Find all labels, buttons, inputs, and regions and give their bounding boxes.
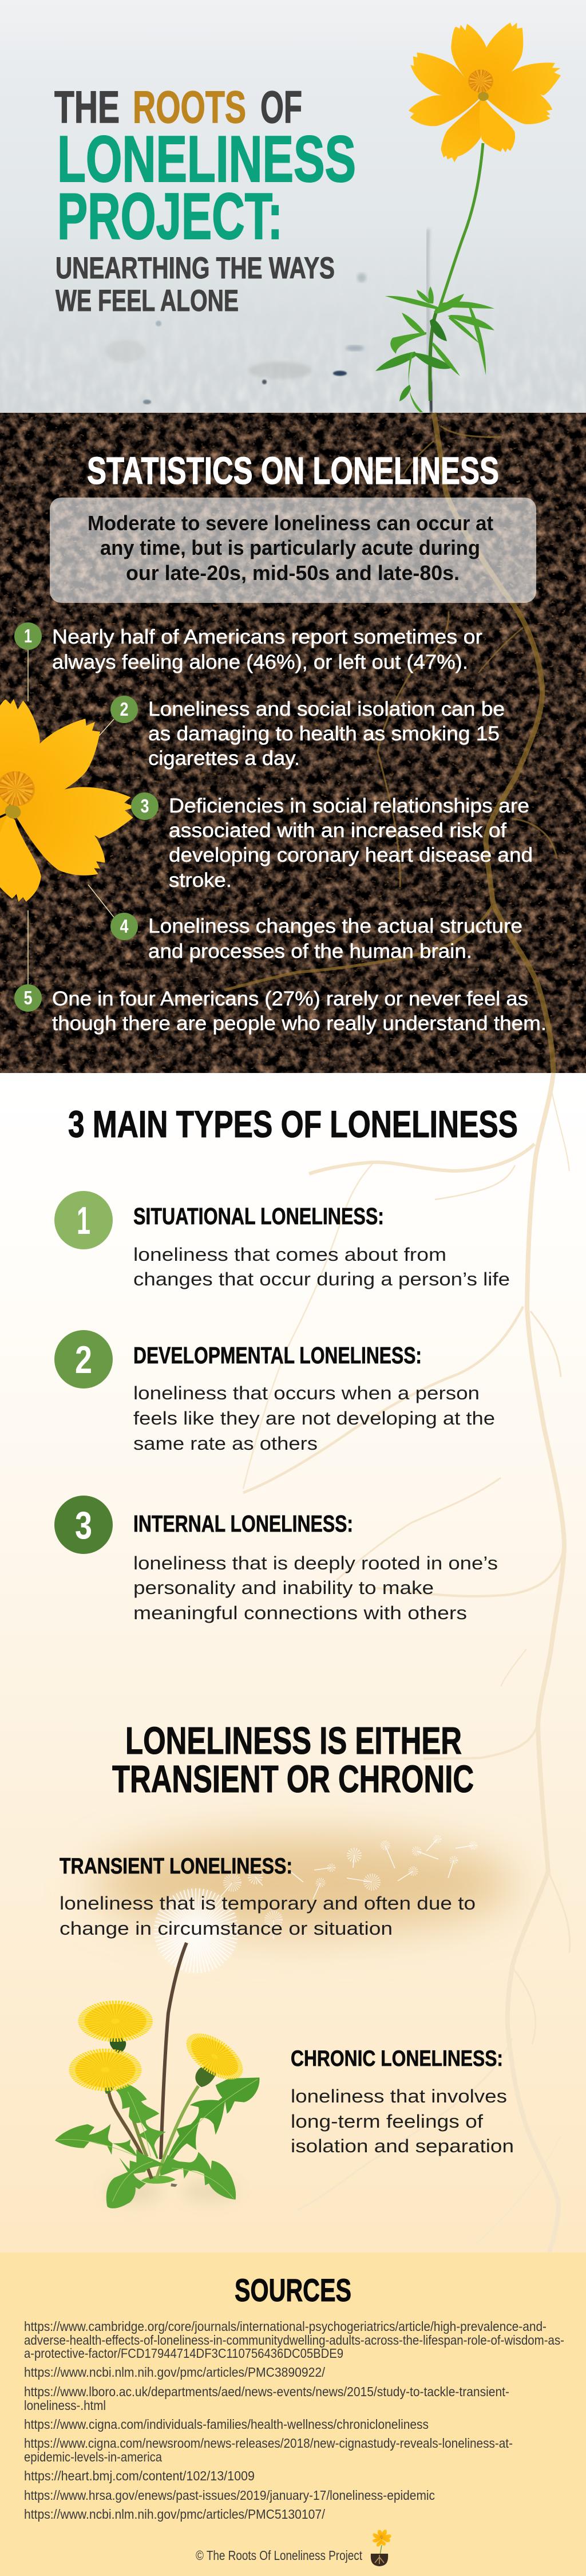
type 3: internal: 3 <box>75 1504 92 1547</box>
type 2: developmental: same rate as others <box>133 1433 318 1454</box>
source list: https://www.cigna.com/individuals-families/health-wellness/chronicloneliness <box>24 2417 429 2432</box>
source list: https://www.ncbi.nlm.nih.gov/pmc/articles/PMC3890922/ <box>24 2365 326 2380</box>
panel: sources <box>0 2252 586 2576</box>
title line 2: LONELINESS <box>57 123 356 196</box>
title <box>54 81 356 318</box>
stat 5: though there are people who really understand them. <box>52 1012 547 1035</box>
type 3: internal: meaningful connections with others <box>133 1603 467 1623</box>
stat 3: developing coronary heart disease and <box>169 844 533 866</box>
type 3: internal: INTERNAL LONELINESS: <box>133 1510 353 1537</box>
transient loneliness text <box>60 1854 476 1939</box>
heading: sources: SOURCES <box>235 2272 351 2308</box>
heading: transient or chronic: TRANSIENT OR CHRONIC <box>112 1758 474 1801</box>
stat 4: and processes of the human brain. <box>148 940 472 962</box>
roots on cream <box>243 1073 570 2252</box>
dandelion flower heads <box>110 2035 126 2053</box>
stat 4: Loneliness changes the actual structure <box>148 915 522 937</box>
transient loneliness text: TRANSIENT LONELINESS: <box>60 1854 292 1879</box>
title line 3: PROJECT: <box>57 180 283 253</box>
callout box: Moderate to severe loneliness can occur at <box>88 511 493 535</box>
icon: logo flower in soil pot <box>371 2530 391 2566</box>
type 2: developmental: DEVELOPMENTAL LONELINESS: <box>133 1342 422 1368</box>
type 2: developmental <box>54 1330 495 1454</box>
type 3: internal: loneliness that is deeply rooted in one’s <box>133 1553 498 1573</box>
chronic loneliness text: long-term feelings of <box>291 2111 483 2132</box>
title line 1: ROOTS <box>133 81 246 132</box>
source list: epidemic-levels-in-america <box>24 2449 162 2464</box>
subtitle line 1: UNEARTHING THE WAYS <box>56 251 335 285</box>
stat 4 <box>110 913 522 962</box>
chronic loneliness text: isolation and separation <box>291 2136 514 2156</box>
stat 5: 5 <box>24 987 32 1008</box>
stat 1: always feeling alone (46%), or left out (47%). <box>52 651 468 673</box>
stat 2: as damaging to health as smoking 15 <box>148 723 500 745</box>
chronic loneliness text: loneliness that involves <box>291 2086 507 2106</box>
transient loneliness text: loneliness that is temporary and often due to <box>60 1893 476 1914</box>
transient loneliness text: change in circumstance or situation <box>60 1918 393 1939</box>
stat 3: Deficiencies in social relationships are <box>169 795 529 817</box>
roots in soil <box>224 413 557 1073</box>
chronic loneliness text: CHRONIC LONELINESS: <box>291 2046 503 2071</box>
icon: yellow flower with stem <box>375 22 561 412</box>
callout box <box>50 498 536 603</box>
stat 3: stroke. <box>169 869 232 891</box>
type 3: internal <box>54 1496 498 1623</box>
copyright footer: © The Roots Of Loneliness Project <box>196 2548 362 2563</box>
panel: hero <box>0 0 586 413</box>
stat 4: 4 <box>120 916 129 937</box>
source list: https://www.ncbi.nlm.nih.gov/pmc/articles/PMC5130107/ <box>24 2507 326 2522</box>
stat 3 <box>131 792 533 891</box>
stat 1: 1 <box>24 625 32 646</box>
panel: soil statistics <box>0 413 586 1073</box>
connector lines <box>28 650 133 985</box>
heading: transient or chronic: LONELINESS IS EITHER <box>125 1719 462 1762</box>
stat 5: One in four Americans (27%) rarely or never feel as <box>52 988 528 1010</box>
heading: transient or chronic <box>112 1719 474 1801</box>
type 1: situational: changes that occur during a person’s life <box>133 1269 510 1289</box>
source list: https://www.cigna.com/newsroom/news-releases/2018/new-cignastudy-reveals-loneliness-at- <box>24 2436 513 2451</box>
type 3: internal: personality and inability to make <box>133 1577 434 1598</box>
icon: yellow flower at left edge <box>0 672 157 941</box>
stat 5 <box>14 984 547 1035</box>
title line 1: THE <box>54 81 120 132</box>
title line 1: OF <box>260 81 302 132</box>
source list: https://www.hrsa.gov/enews/past-issues/2019/january-17/loneliness-epidemic <box>24 2488 435 2503</box>
chronic loneliness text <box>291 2046 514 2156</box>
stat 3: 3 <box>141 795 149 816</box>
source list: a-protective-factor/FCD17944714DF3C110756436DC05BDE9 <box>24 2346 343 2361</box>
icon: dandelion plant <box>55 1943 259 2208</box>
stat 1 <box>14 622 482 673</box>
subtitle line 2: WE FEEL ALONE <box>56 284 239 318</box>
stat 2 <box>110 696 505 770</box>
type 2: developmental: feels like they are not developing at the <box>133 1408 495 1429</box>
type 1: situational: loneliness that comes about from <box>133 1244 446 1265</box>
callout box: any time, but is particularly acute during <box>100 536 480 559</box>
type 1: situational: 1 <box>77 1199 90 1242</box>
source list: loneliness-.html <box>24 2398 106 2413</box>
stat 2: cigarettes a day. <box>148 747 300 770</box>
type 1: situational: SITUATIONAL LONELINESS: <box>133 1203 384 1229</box>
stat 2: Loneliness and social isolation can be <box>148 698 505 720</box>
icon: flying dandelion seeds <box>220 1837 476 1939</box>
source list: https://www.cambridge.org/core/journals/international-psychogeriatrics/article/high-prevalence-and- <box>24 2319 547 2334</box>
source list: https://heart.bmj.com/content/102/13/1009 <box>24 2468 255 2483</box>
glow behind transient text <box>92 1835 515 1932</box>
source list: https://www.lboro.ac.uk/departments/aed/news-events/news/2015/study-to-tackle-transient- <box>24 2384 509 2399</box>
type 2: developmental: loneliness that occurs when a person <box>133 1383 480 1403</box>
type 2: developmental: 2 <box>75 1338 92 1382</box>
panel: cream background with roots <box>0 1073 586 2252</box>
stat 1: Nearly half of Americans report sometimes or <box>52 626 482 648</box>
source list <box>24 2319 564 2522</box>
dandelion seed head <box>151 1885 242 1977</box>
stat 3: associated with an increased risk of <box>169 819 506 842</box>
type 1: situational <box>54 1191 510 1289</box>
callout box: our late-20s, mid-50s and late-80s. <box>126 561 460 585</box>
stat 2: 2 <box>120 699 128 720</box>
